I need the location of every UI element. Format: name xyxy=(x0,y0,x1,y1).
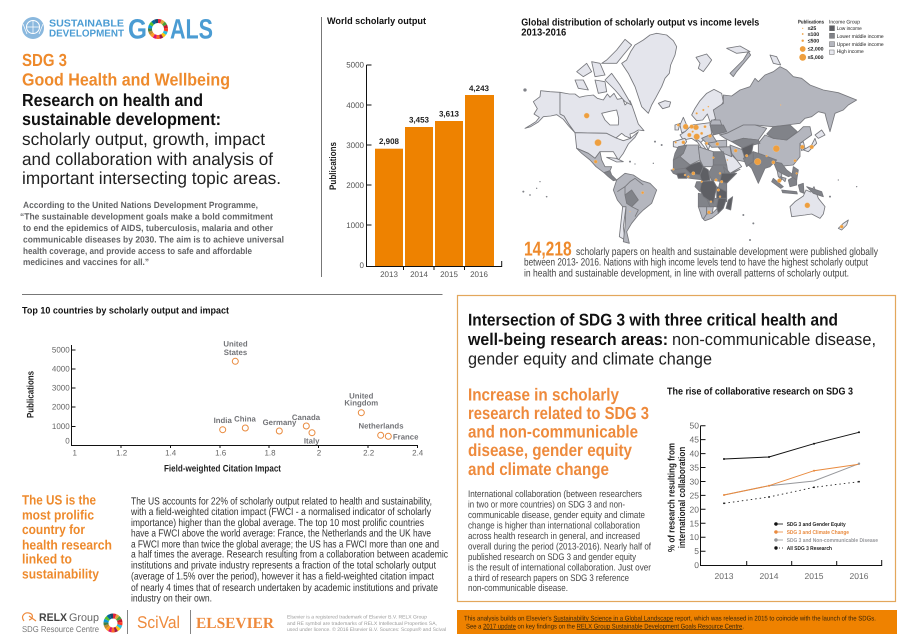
legend: income group: Income Group xyxy=(829,20,860,26)
footer banner: This analysis builds on Elsevier's Sustainability Science in a Global Landscape report, which was released in 2015 to coincide with the launch of the SDGs. xyxy=(464,615,876,622)
heading: map title xyxy=(521,18,760,39)
y axis labels: 2000 xyxy=(346,181,365,190)
chart legend: SDG 3 and Climate Change xyxy=(787,530,849,536)
bar values: 3,453 xyxy=(409,116,430,124)
text block: UNDP quote: communicable diseases by 2030. The aim is to achieve universal xyxy=(23,234,284,244)
y axis labels: 5000 xyxy=(52,345,70,354)
logo: Elsevier: ELSEVIER xyxy=(196,615,275,632)
text block: trademark notice: and RE symbol are trademarks of RELX Intellectual Properties SA, xyxy=(287,621,437,627)
y axis title: international collaboration xyxy=(677,447,688,548)
text block: UNDP quote xyxy=(20,200,284,267)
text block: UNDP quote: health coverage, and provide access to safe and affordable xyxy=(23,246,252,256)
legend: income group: Low income xyxy=(837,26,862,32)
heading: intersection title: well-being research areas: xyxy=(467,330,668,349)
y axis labels: 35 xyxy=(690,462,699,472)
logo: RELX Group: RELX xyxy=(39,612,68,624)
heading: US most prolific xyxy=(22,492,112,582)
point labels: Kingdom xyxy=(344,399,378,408)
y axis labels: 2000 xyxy=(52,402,70,412)
bar values: 2,908 xyxy=(379,137,400,146)
series: climate change xyxy=(724,464,859,495)
chart legend xyxy=(774,522,878,552)
legend: publications: Publications xyxy=(798,20,824,26)
bars xyxy=(375,95,494,266)
bar values xyxy=(379,84,490,146)
text block: US analysis: a half times the average. Research resulting from a collaboration between academic xyxy=(131,550,448,560)
heading: bar chart title: World scholarly output xyxy=(327,16,427,27)
axes xyxy=(366,65,502,270)
title: SDG 3 heading: important intersecting topic areas. xyxy=(22,168,281,188)
divider column xyxy=(22,17,442,294)
heading: scatter title: Top 10 countries by scholarly output and impact xyxy=(22,306,230,317)
heading: increase in research: and non-communicable xyxy=(468,422,638,442)
heading: increase in research: disease, gender equity xyxy=(468,440,632,460)
bar values: 4,243 xyxy=(469,84,490,93)
text block: US analysis: with a field-weighted citation impact (FWCI - a normalised indicator of scholarly xyxy=(130,507,432,518)
x axis labels: 2.2 xyxy=(363,449,375,458)
logos: RELX, SciVal, Elsevier xyxy=(22,610,275,634)
legend: income group: Upper middle income xyxy=(837,42,884,48)
text block: international collaboration: in two or more countries) on SDG 3 and non- xyxy=(468,500,625,511)
text block: international collaboration: across health research in general, and increased xyxy=(468,531,640,542)
bar chart: World scholarly output xyxy=(327,16,502,279)
point labels: United xyxy=(223,340,248,349)
point labels xyxy=(214,340,419,446)
legend: publications: ≤25 xyxy=(808,26,816,32)
high income countries xyxy=(525,33,848,240)
heading: US most prolific: sustainability xyxy=(22,566,99,582)
text block: trademark notice: used under licence. © 2016 Elsevier B.V. Sources: Scopus® and Scival xyxy=(287,627,446,633)
series: all SDG 3 research xyxy=(724,482,859,503)
heading: map title: 2013-2016 xyxy=(521,28,567,39)
legend: publications: ≤2,000 xyxy=(808,46,824,52)
text block: US analysis: a FWCI more than twice the global average; the US has a FWCI more than one and xyxy=(131,540,439,550)
point labels: India xyxy=(214,416,232,425)
text block: US analysis: institutions and private industry represents a fraction of the total scholarly output xyxy=(131,560,436,572)
y axis labels: 4000 xyxy=(52,364,70,374)
x axis labels: 1.4 xyxy=(165,449,177,458)
text block: US analysis xyxy=(130,496,448,604)
y axis labels: 0 xyxy=(694,560,699,570)
x axis labels: 1.8 xyxy=(264,449,276,458)
legend: income group xyxy=(829,20,884,55)
upper middle income countries xyxy=(577,52,857,243)
text block: international collaboration: change is higher than international collaboration xyxy=(468,521,640,532)
legend: publications: ≤100 xyxy=(808,32,819,38)
y axis labels: 3000 xyxy=(346,141,365,150)
point labels: Canada xyxy=(292,413,321,422)
title: SDG 3 heading: scholarly output, growth, impact xyxy=(22,129,265,149)
text block: international collaboration: is the result of international collaboration. Just over xyxy=(468,563,651,574)
x axis labels: 1 xyxy=(72,449,77,458)
text block: international collaboration: International collaboration (between researchers xyxy=(468,489,642,500)
y axis labels xyxy=(52,345,70,446)
heading: line chart title: The rise of collaborative research on SDG 3 xyxy=(667,387,853,398)
logo: Sustainable Development Goals: G xyxy=(128,14,147,44)
logo: RELX Group: Group xyxy=(69,612,99,624)
y axis labels: 45 xyxy=(690,434,699,444)
y axis labels: 10 xyxy=(690,532,699,542)
x axis labels: 2014 xyxy=(410,270,428,279)
icon: SDG ring xyxy=(106,616,120,630)
point labels: United xyxy=(349,392,374,401)
y axis labels: 40 xyxy=(690,448,699,458)
heading: intersection title: non-communicable disease, xyxy=(672,330,876,349)
x axis labels: 2015 xyxy=(440,270,458,279)
title: SDG 3 heading: and collaboration with analysis of xyxy=(22,149,273,169)
x axis labels: 2016 xyxy=(470,270,488,279)
y axis labels xyxy=(346,61,365,270)
y axis labels: 0 xyxy=(65,437,70,446)
heading: increase in research: Increase in scholarly xyxy=(468,384,619,404)
heading: US most prolific: most prolific xyxy=(22,508,94,522)
logo: Sustainable Development Goals xyxy=(22,14,213,44)
bar values: 3,613 xyxy=(439,110,460,119)
text block: US analysis: (average of 1.5% over the period), however it has a field-weighted citation impact xyxy=(131,572,434,582)
chart legend: All SDG 3 Research xyxy=(787,546,833,552)
y axis labels: 5 xyxy=(694,546,699,556)
heading: intersection title: Intersection of SDG 3 with three critical health and xyxy=(468,311,838,330)
footer banner xyxy=(457,610,897,634)
text block: UNDP quote: According to the United Nations Development Programme, xyxy=(23,200,258,210)
y axis labels: 30 xyxy=(690,476,699,486)
heading: increase in research xyxy=(468,384,649,479)
x axis labels: 2015 xyxy=(805,571,824,581)
point labels: France xyxy=(393,433,419,442)
heading: US most prolific: health research xyxy=(22,538,112,552)
y axis labels: 25 xyxy=(690,490,699,500)
point labels: Germany xyxy=(263,418,297,427)
heading: US most prolific: country for xyxy=(22,522,86,537)
text block: UNDP quote: “The sustainable development goals make a bold commitment xyxy=(20,212,273,222)
logo: SciVal: SciVal xyxy=(137,613,180,632)
text block: US analysis: have a FWCI above the world average: France, the Netherlands and the UK have xyxy=(131,528,431,540)
text block: international collaboration: non-communicable disease. xyxy=(468,583,568,594)
heading: US most prolific: linked to xyxy=(22,552,72,566)
y axis title: Publications xyxy=(328,142,339,190)
point labels: China xyxy=(234,415,256,424)
axes xyxy=(72,345,418,448)
text block: US analysis: of nearly 4 times that of research undertaken by academic institutions and private xyxy=(131,583,438,594)
x axis labels: 2013 xyxy=(715,571,734,581)
axis titles: Publications xyxy=(26,371,36,418)
point labels: States xyxy=(224,348,248,357)
callout: 14,218 papers: 14,218 xyxy=(524,238,572,260)
callout: 14,218 papers xyxy=(524,238,879,279)
text block: US analysis: importance) higher than the global average. The top 10 most prolific countries xyxy=(131,518,424,529)
heading: intersection title xyxy=(467,311,876,368)
data points xyxy=(220,358,391,439)
heading: map title: Global distribution of scholarly output vs income levels xyxy=(521,18,760,29)
text block: US analysis: The US accounts for 22% of scholarly output related to health and sustainability, xyxy=(131,496,432,508)
chart legend: SDG 3 and Gender Equity xyxy=(787,522,847,528)
point labels: Netherlands xyxy=(358,422,404,431)
logo: Sustainable Development Goals: SUSTAINABLE xyxy=(49,18,124,30)
publication bubbles xyxy=(584,104,843,228)
legend: publications xyxy=(798,20,824,61)
y axis labels: 3000 xyxy=(52,384,70,392)
footer banner: See a 2017 update on key findings on the RELX Group Sustainable Development Goals Resource Centre. xyxy=(466,623,744,630)
heading: increase in research: and climate change xyxy=(468,459,609,479)
legend: publications: ≤5,000 xyxy=(808,55,824,61)
x axis labels: 2 xyxy=(317,449,322,458)
low income countries xyxy=(677,143,753,213)
series: non-communicable disease xyxy=(724,464,859,495)
legend: income group: High income xyxy=(837,49,864,55)
axes xyxy=(700,426,882,566)
heading: increase in research: research related to SDG 3 xyxy=(468,403,649,423)
x axis labels: 1.6 xyxy=(215,449,227,458)
x axis labels xyxy=(380,270,488,279)
line chart: collaborative research xyxy=(666,387,882,581)
heading: US most prolific: The US is the xyxy=(22,492,96,508)
y axis labels: 50 xyxy=(690,420,699,430)
point labels: Italy xyxy=(304,437,320,446)
y axis labels xyxy=(690,420,699,570)
x axis labels: 2013 xyxy=(380,270,398,279)
text block: international collaboration: published research on SDG 3 and gender equity xyxy=(468,552,636,563)
x axis labels xyxy=(72,449,424,458)
chart legend: SDG 3 and Non-communicable Disease xyxy=(787,538,878,544)
world map xyxy=(522,33,857,243)
text block: international collaboration: overall during the period (2013-2016). Nearly half of xyxy=(468,542,651,553)
panel: intersection of SDG 3 xyxy=(458,296,896,602)
text block: trademark notice: Elsevier is a registered trademark of Elsevier B.V. RELX Group xyxy=(287,614,427,620)
legend: income group: Lower middle income xyxy=(837,34,884,40)
series: gender equity xyxy=(724,432,859,459)
x axis labels: 2.4 xyxy=(412,449,424,458)
title: SDG 3 heading: sustainable development: xyxy=(22,109,221,129)
text block: international collaboration: a third of research papers on SDG 3 reference xyxy=(468,573,629,584)
x axis labels: 1.2 xyxy=(116,449,128,458)
heading: intersection title: gender equity and climate change xyxy=(468,350,712,368)
title: SDG 3 heading: Good Health and Wellbeing xyxy=(22,70,230,90)
text block: UNDP quote: medicines and vaccines for all.” xyxy=(23,257,149,267)
y axis labels: 1000 xyxy=(52,422,70,431)
scatter chart: Top 10 countries: Field-weighted Citation Impact xyxy=(164,464,282,475)
logo: Sustainable Development Goals: ALS xyxy=(170,14,213,44)
title: SDG 3 heading: SDG 3 xyxy=(22,50,67,70)
y axis labels: 0 xyxy=(360,261,365,270)
lower middle income countries xyxy=(604,125,823,207)
x axis labels: 2014 xyxy=(760,571,779,581)
logo: Sustainable Development Goals: DEVELOPMENT xyxy=(49,28,124,40)
title: SDG 3 heading xyxy=(22,50,281,188)
y axis labels: 5000 xyxy=(346,61,365,70)
legend: publications: ≤500 xyxy=(808,38,819,44)
x axis labels xyxy=(715,571,869,581)
y axis labels: 1000 xyxy=(346,221,365,230)
logo: RELX Group: SDG Resource Centre xyxy=(22,624,99,634)
text block: US analysis: industry on their own. xyxy=(131,594,212,604)
markers xyxy=(723,431,860,504)
text block: trademark notice xyxy=(287,614,446,633)
small islands xyxy=(522,88,857,241)
y axis title xyxy=(666,443,688,552)
text block: international collaboration xyxy=(468,489,651,594)
title: SDG 3 heading: Research on health and xyxy=(22,90,203,110)
text block: UNDP quote: to end the epidemics of AIDS, tuberculosis, malaria and other xyxy=(23,223,273,233)
logo: RELX Group xyxy=(22,612,99,634)
y axis labels: 4000 xyxy=(346,101,365,110)
y axis labels: 20 xyxy=(690,504,699,514)
x axis labels: 2016 xyxy=(850,571,869,581)
y axis labels: 15 xyxy=(690,518,699,528)
y axis title: % of research resulting from xyxy=(666,443,678,552)
text block: international collaboration: communicable disease, gender equity and climate xyxy=(468,510,645,521)
map legend xyxy=(798,20,884,61)
scatter chart: Top 10 countries xyxy=(22,306,424,475)
